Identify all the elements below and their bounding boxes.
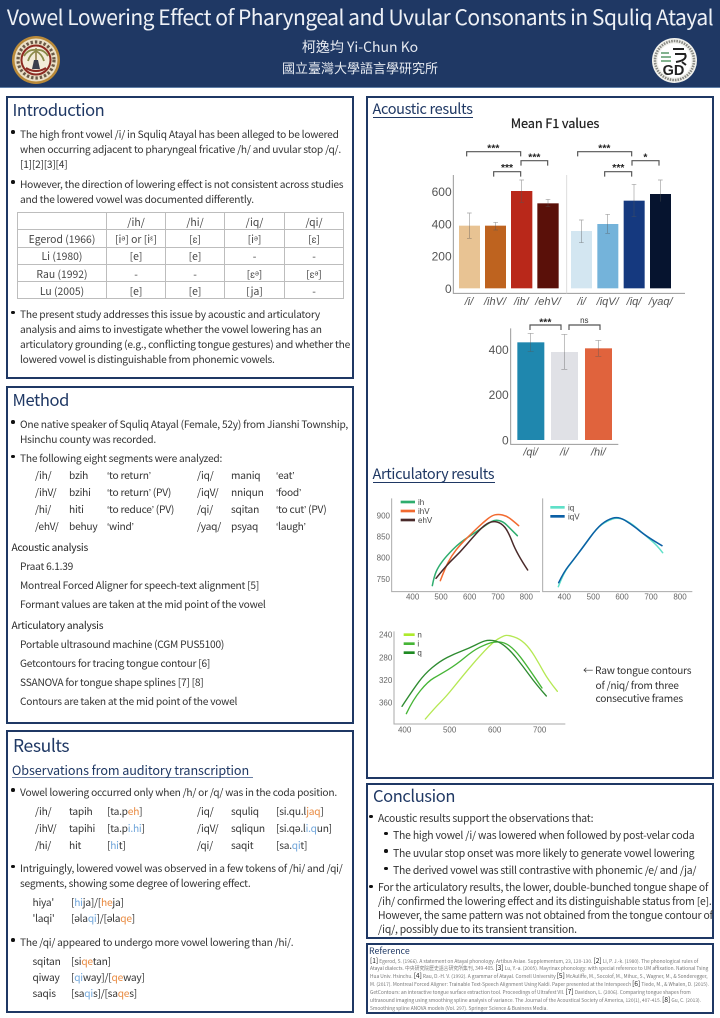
word list: eight segments: /ihV/ [35, 484, 56, 499]
bullet: problem: However, the direction of lowering effect is not consistent across studies [20, 176, 343, 190]
word list: eight segments: /ih/ [35, 467, 51, 482]
bullet: aims: lowered vowel is distinguishable from phonemic vowels. [20, 351, 275, 366]
word list: eight segments: ‘laugh’ [276, 518, 306, 533]
line charts: tongue contours by segment: 850 [377, 533, 391, 542]
table: previous transcriptions: Lu (2005) [40, 283, 84, 298]
line charts: tongue contours by segment: 800 [377, 554, 391, 563]
table: previous transcriptions [17, 212, 344, 299]
annotation: arrow and note on raw contours: ← Raw tongue contours [583, 662, 691, 677]
table: previous transcriptions: [ja] [246, 283, 263, 298]
subheading: articulatory analysis: Articulatory analysis [12, 616, 103, 632]
table: previous transcriptions: - [312, 248, 316, 263]
bar chart: mean F1 by vowel and coda: *** [528, 152, 541, 163]
word list: eight segments: ‘to reduce’ (PV) [107, 501, 174, 516]
line charts: tongue contours by segment: 500 [434, 593, 448, 602]
bullet: acoustic conclusion: Acoustic results support the observations that: [378, 810, 593, 825]
line chart: raw contours of niq: 600 [488, 726, 502, 735]
reference list: ultrasound imaging using smoothing spline analysis of variance. The Journal of the Acoustical Society of America, 120(1), 407-415. [8] Gu, C. (2013). [370, 994, 701, 1004]
word list: transcriptions: hit [69, 836, 81, 852]
bar chart: mean F1 by vowel and coda: /ehV/ [534, 296, 562, 308]
word list: transcriptions: [si.qu.ljaq] [276, 802, 324, 818]
bullet: articulatory conclusion: For the articulatory results, the lower, double-bunched tongue shape of [378, 879, 708, 894]
panel: conclusion [366, 783, 714, 939]
word list: transcriptions: sqliqun [231, 820, 265, 834]
word list: eight segments: ‘to return’ [107, 467, 151, 482]
line chart: raw contours of niq: 400 [398, 726, 412, 735]
bullet: articulatory conclusion [378, 880, 710, 936]
word list: eight segments: /iq/ [197, 467, 213, 482]
line charts: tongue contours by segment: 700 [644, 593, 658, 602]
bar chart: onset comparison: 200 [489, 388, 509, 402]
word list: transcriptions: [ta.peh] [107, 802, 142, 818]
panel: acoustic and articulatory results [366, 96, 714, 779]
word list: transcriptions: tapih [69, 802, 92, 818]
bullet: background: [1][2][3][4] [20, 156, 67, 170]
table: previous transcriptions: - [193, 266, 197, 281]
line charts: tongue contours by segment: 900 [377, 511, 391, 520]
heading: articulatory results: Articulatory results [372, 463, 494, 484]
bullet: aims: The present study addresses this issue by acoustic and articulatory [20, 306, 320, 321]
line chart: raw contours of niq: 320 [379, 676, 393, 685]
bullet: aims [20, 306, 352, 366]
word list: qi examples: sqitan [32, 953, 61, 968]
line charts: tongue contours by segment: 500 [587, 593, 601, 602]
word list: eight segments: ‘to cut’ (PV) [276, 501, 326, 516]
bar chart: mean F1 by vowel and coda: 400 [432, 217, 452, 231]
heading: method: Method [12, 387, 69, 411]
bar chart: mean F1 by vowel and coda: /ihV/ [483, 296, 507, 308]
word list: eight segments: /hi/ [35, 501, 51, 516]
list: acoustic tools: Montreal Forced Aligner for speech-text alignment [5] [20, 577, 259, 592]
bar chart: mean F1 by vowel and coda: 600 [432, 185, 452, 199]
bullet: onset tokens: Intriguingly, lowered vowel was observed in a few tokens of /hi/ and /qi/ [20, 860, 342, 875]
heading: reference: Reference [369, 944, 410, 957]
word list: transcriptions [35, 802, 332, 852]
bullet: participant [20, 416, 352, 446]
annotation: arrow and note on raw contours: consecutive frames [596, 690, 683, 705]
word list: onset examples: [əlaqi]/[əlaqe] [71, 910, 135, 925]
sub-bullets: acoustic findings: The uvular stop onset was more likely to generate vowel lowering [393, 845, 694, 860]
icon: institute logo: GD [663, 63, 684, 79]
line charts: tongue contours by segment: 600 [615, 593, 629, 602]
word list: transcriptions: /ihV/ [35, 820, 56, 834]
line chart: raw contours of niq: i [418, 640, 420, 649]
table: previous transcriptions: /qi/ [305, 214, 323, 229]
bar chart: mean F1 by vowel and coda: *** [487, 143, 500, 154]
sub-bullets: acoustic findings [384, 827, 696, 877]
word list: eight segments: nniqun [231, 484, 264, 499]
line chart: raw contours of niq: 700 [533, 726, 547, 735]
list: acoustic tools: Formant values are taken at the mid point of the vowel [20, 596, 266, 611]
line chart: raw contours of niq: 500 [443, 726, 457, 735]
bar chart: onset comparison: *** [539, 317, 552, 328]
subheading: observations: Observations from auditory transcription [12, 760, 249, 779]
word list: transcriptions: [si.qə.li.qun] [276, 820, 332, 834]
sub-bullets: acoustic findings: The high vowel /i/ was lowered when followed by post-velar coda [393, 827, 694, 842]
table: previous transcriptions: Li (1980) [42, 248, 82, 263]
line charts: tongue contours by segment [377, 498, 692, 602]
word list: onset examples [32, 894, 135, 925]
table: previous transcriptions: - [312, 283, 316, 298]
table: previous transcriptions: Egerod (1966) [29, 231, 95, 246]
line charts: tongue contours by segment: 800 [673, 593, 687, 602]
panel: method [6, 386, 354, 724]
line chart: raw contours of niq: 240 [379, 631, 393, 640]
table: previous transcriptions: [ɛᵊ] [247, 266, 262, 281]
bullet: background [20, 126, 350, 170]
table: previous transcriptions: /hi/ [186, 214, 204, 229]
word list: transcriptions: /hi/ [35, 836, 51, 852]
table: previous transcriptions: - [134, 266, 138, 281]
reference list: [1] Egerod, S. (1966). A statement on Atayal phonology. Artibus Asiae. Supplementum, 23, 120-130. [2] Li, P. J.-k. (1980). The phonological rules of [370, 954, 698, 964]
line charts: tongue contours by segment: 750 [377, 575, 391, 584]
bar chart: mean F1 by vowel and coda: /yaq/ [648, 296, 674, 308]
word list: eight segments: /ehV/ [35, 518, 59, 533]
line chart: raw contours of niq [379, 631, 566, 735]
bar chart: mean F1 by vowel and coda: *** [612, 163, 625, 174]
bar chart: mean F1 by vowel and coda: *** [598, 143, 611, 154]
word list: eight segments: psyaq [231, 518, 258, 533]
bullet: background: when occurring adjacent to pharyngeal fricative /h/ and uvular stop /q/. [20, 140, 341, 156]
word list: transcriptions: /ih/ [35, 802, 51, 818]
word list: qi examples: [qiway]/[qeway] [71, 969, 145, 984]
word list: eight segments: behuy [69, 518, 97, 533]
table: previous transcriptions: [iᵊ] [248, 231, 261, 246]
table: previous transcriptions: /ih/ [127, 214, 145, 229]
word list: onset examples: hiya' [32, 894, 54, 909]
list: articulatory tools [20, 636, 237, 708]
bullet: aims: articulatory grounding (e.g., conflicting tongue gestures) and whether the [20, 336, 350, 351]
icon: university seal [12, 36, 60, 84]
bullet: onset tokens [20, 860, 352, 890]
heading: conclusion: Conclusion [373, 783, 455, 807]
word list: transcriptions: [ta.pi.hi] [107, 820, 145, 834]
bar chart: onset comparison: /qi/ [522, 447, 539, 459]
word list: eight segments: ‘wind’ [107, 518, 134, 533]
line charts: tongue contours by segment: 600 [463, 593, 477, 602]
reference list: Hua Univ. Hsinchu. [4] Rau, D.-H. V. (1992). A grammar of Atayal. Cornell University [5] McAuliffe, M., Socolof, M., Mihuc, S., Wagner, M., & Sonderegger, [370, 970, 708, 980]
word list: eight segments: bzih [69, 467, 88, 482]
bullet: segments: The following eight segments were analyzed: [20, 450, 222, 465]
line charts: tongue contours by segment: 400 [406, 593, 420, 602]
table: previous transcriptions: [e] [130, 248, 142, 263]
table: previous transcriptions: [e] [189, 283, 201, 298]
table: previous transcriptions: [ɛᵊ] [306, 266, 322, 281]
bar chart: mean F1 by vowel and coda: * [643, 152, 648, 163]
table: previous transcriptions: Rau (1992) [36, 266, 88, 281]
chart title: Mean F1 values [511, 113, 599, 132]
line chart: raw contours of niq: 360 [379, 699, 393, 708]
reference list: Atayal dialects. 中央研究院歷史語言研究所集刊, 349-405. [3] Lu, Y.-a. (2005). Mayrinax phonology: with special reference to UM affixation. National Tsing [370, 962, 708, 972]
line charts: tongue contours by segment: ehV [418, 516, 433, 525]
line charts: tongue contours by segment: ih [418, 498, 424, 507]
bar chart: mean F1 by vowel and coda: 200 [432, 250, 452, 264]
word list: qi examples [32, 953, 145, 1000]
list: acoustic tools [20, 558, 266, 611]
word list: eight segments [35, 467, 326, 533]
bullet: participant: One native speaker of Squliq Atayal (Female, 52y) from Jianshi Township, [20, 416, 348, 430]
author: 柯逸均 Yi-Chun Ko [302, 37, 418, 57]
word list: eight segments: /qi/ [197, 501, 213, 516]
header banner [0, 0, 720, 88]
reference list: Smoothing spline ANOVA models (Vol. 297). Springer Science & Business Media. [370, 1005, 548, 1012]
bar chart: onset comparison [488, 316, 618, 459]
word list: transcriptions: tapihi [69, 820, 95, 834]
word list: qi examples: qiway [32, 969, 60, 984]
word list: eight segments: sqitan [231, 501, 259, 516]
word list: transcriptions: /iq/ [197, 802, 213, 818]
list: acoustic tools: Praat 6.1.39 [20, 558, 73, 572]
word list: eight segments: /yaq/ [197, 518, 221, 533]
bar chart: mean F1 by vowel and coda: 0 [445, 282, 452, 296]
bullet: background: The high front vowel /i/ in Squliq Atayal has been alleged to be lowered [20, 126, 339, 140]
line charts: tongue contours by segment: 700 [491, 593, 505, 602]
bar chart: onset comparison: /i/ [559, 447, 570, 459]
bar chart: onset comparison: 400 [489, 343, 509, 357]
bar chart: mean F1 by vowel and coda: *** [501, 163, 514, 174]
table: previous transcriptions: [ɛ] [189, 231, 201, 246]
word list: eight segments: /iqV/ [197, 484, 218, 499]
table: previous transcriptions: [iᵊ] or [iᵋ] [115, 231, 157, 246]
bullet: articulatory conclusion: However, the same pattern was not obtained from the tongue contour of [378, 907, 713, 922]
sub-bullets: acoustic findings: The derived vowel was still contrastive with phonemic /e/ and /ja/ [393, 862, 696, 877]
line chart: raw contours of niq: n [418, 631, 422, 640]
word list: eight segments: maniq [231, 467, 260, 482]
subheading: acoustic analysis: Acoustic analysis [12, 538, 88, 554]
word list: transcriptions: [hit] [107, 836, 126, 852]
table: previous transcriptions: [ɛ] [308, 231, 320, 246]
bar chart: mean F1 by vowel and coda: /i/ [464, 296, 474, 308]
table: previous transcriptions: /iq/ [246, 214, 263, 229]
annotation: arrow and note on raw contours [583, 662, 692, 705]
title: Vowel Lowering Effect of Pharyngeal and Uvular Consonants in Squliq Atayal [7, 2, 713, 32]
list: articulatory tools: Portable ultrasound machine (CGM PUS5100) [20, 636, 224, 650]
word list: qi examples: [siqetan] [71, 953, 111, 968]
table: previous transcriptions: [e] [189, 248, 201, 263]
bullet: participant: Hsinchu county was recorded. [20, 430, 156, 446]
bar chart: mean F1 by vowel and coda: /ih/ [513, 296, 530, 308]
word list: eight segments: ‘food’ [276, 484, 301, 499]
list: articulatory tools: Getcontours for tracing tongue contour [6] [20, 655, 210, 670]
annotation: arrow and note on raw contours: of /niq/ from three [596, 676, 679, 692]
line chart: raw contours of niq: 280 [379, 654, 393, 663]
list: articulatory tools: SSANOVA for tongue shape splines [7] [8] [20, 674, 204, 689]
line chart: raw contours of niq: q [418, 649, 422, 658]
line charts: tongue contours by segment: 800 [520, 593, 534, 602]
word list: transcriptions: /iqV/ [197, 820, 218, 834]
word list: onset examples: [hija]/[heja] [71, 894, 124, 909]
bar chart: mean F1 by vowel and coda: /iqV/ [596, 296, 620, 308]
line charts: tongue contours by segment: ihV [418, 507, 430, 516]
line charts: tongue contours by segment: 400 [558, 593, 572, 602]
word list: transcriptions: saqit [231, 836, 253, 852]
line charts: tongue contours by segment: iq [568, 503, 574, 512]
affiliation: 國立臺灣大學語言學研究所 [282, 58, 438, 77]
bullet: articulatory conclusion: /iq/, possibly due to its transient transition. [378, 921, 577, 936]
icon: institute logo [652, 38, 697, 83]
bar chart: mean F1 by vowel and coda: /iq/ [626, 296, 642, 308]
reference list: M. (2017). Montreal Forced Aligner: Trainable Text-Speech Alignment Using Kaldi. Paper presented at the Interspeech [6] Tiede, M., & Whalen, D. (2015). [370, 978, 709, 988]
word list: eight segments: bzihi [69, 484, 91, 499]
bullet: qi versus hi: The /qi/ appeared to undergo more vowel lowering than /hi/. [20, 934, 293, 948]
heading: acoustic results: Acoustic results [372, 98, 473, 118]
word list: eight segments: hiti [69, 501, 84, 516]
heading: results: Results [13, 732, 69, 758]
list: articulatory tools: Contours are taken at the mid point of the vowel [20, 693, 237, 708]
panel: references [366, 943, 714, 1014]
bullet: articulatory conclusion: /ih/ confirmed the lowering effect and its distinguishable status from [e]. [378, 893, 712, 908]
table: previous transcriptions: - [253, 248, 256, 263]
heading: introduction: Introduction [12, 97, 104, 121]
bar chart: mean F1 by vowel and coda: /i/ [576, 296, 587, 308]
bullet: problem: and the lowered vowel was documented differently. [20, 190, 254, 206]
bullet: onset tokens: segments, showing some degree of lowering effect. [20, 875, 250, 890]
table: previous transcriptions: [e] [130, 283, 142, 298]
word list: eight segments: ‘to return’ (PV) [107, 484, 171, 499]
word list: onset examples: 'laqi' [32, 910, 55, 925]
reference list [370, 954, 709, 1012]
panel: introduction [6, 96, 354, 379]
bar chart: onset comparison: /hi/ [590, 447, 607, 459]
reference list: GetContours: an interactive tongue surface extraction tool. Proceedings of Ultrafest VII. [7] Davidson, L. (2006). Comparing tongue shapes from [370, 986, 691, 996]
bullet: aims: analysis and aims to investigate whether the vowel lowering has an [20, 321, 322, 336]
bullet: coda: Vowel lowering occurred only when /h/ or /q/ was in the coda position. [20, 784, 337, 798]
bar chart: onset comparison: 0 [502, 433, 509, 447]
word list: transcriptions: /qi/ [197, 836, 213, 852]
bar chart: mean F1 by vowel and coda [432, 143, 685, 308]
word list: qi examples: [saqis]/[saqes] [71, 985, 137, 1000]
bullet: problem [20, 176, 350, 206]
line charts: tongue contours by segment: iqV [568, 512, 580, 521]
word list: qi examples: saqis [32, 985, 56, 1000]
word list: transcriptions: [sa.qit] [276, 836, 307, 852]
panel: results [6, 730, 354, 1013]
word list: eight segments: ‘eat’ [276, 467, 294, 482]
word list: transcriptions: squliq [231, 802, 259, 818]
bar chart: onset comparison: ns [580, 316, 589, 325]
